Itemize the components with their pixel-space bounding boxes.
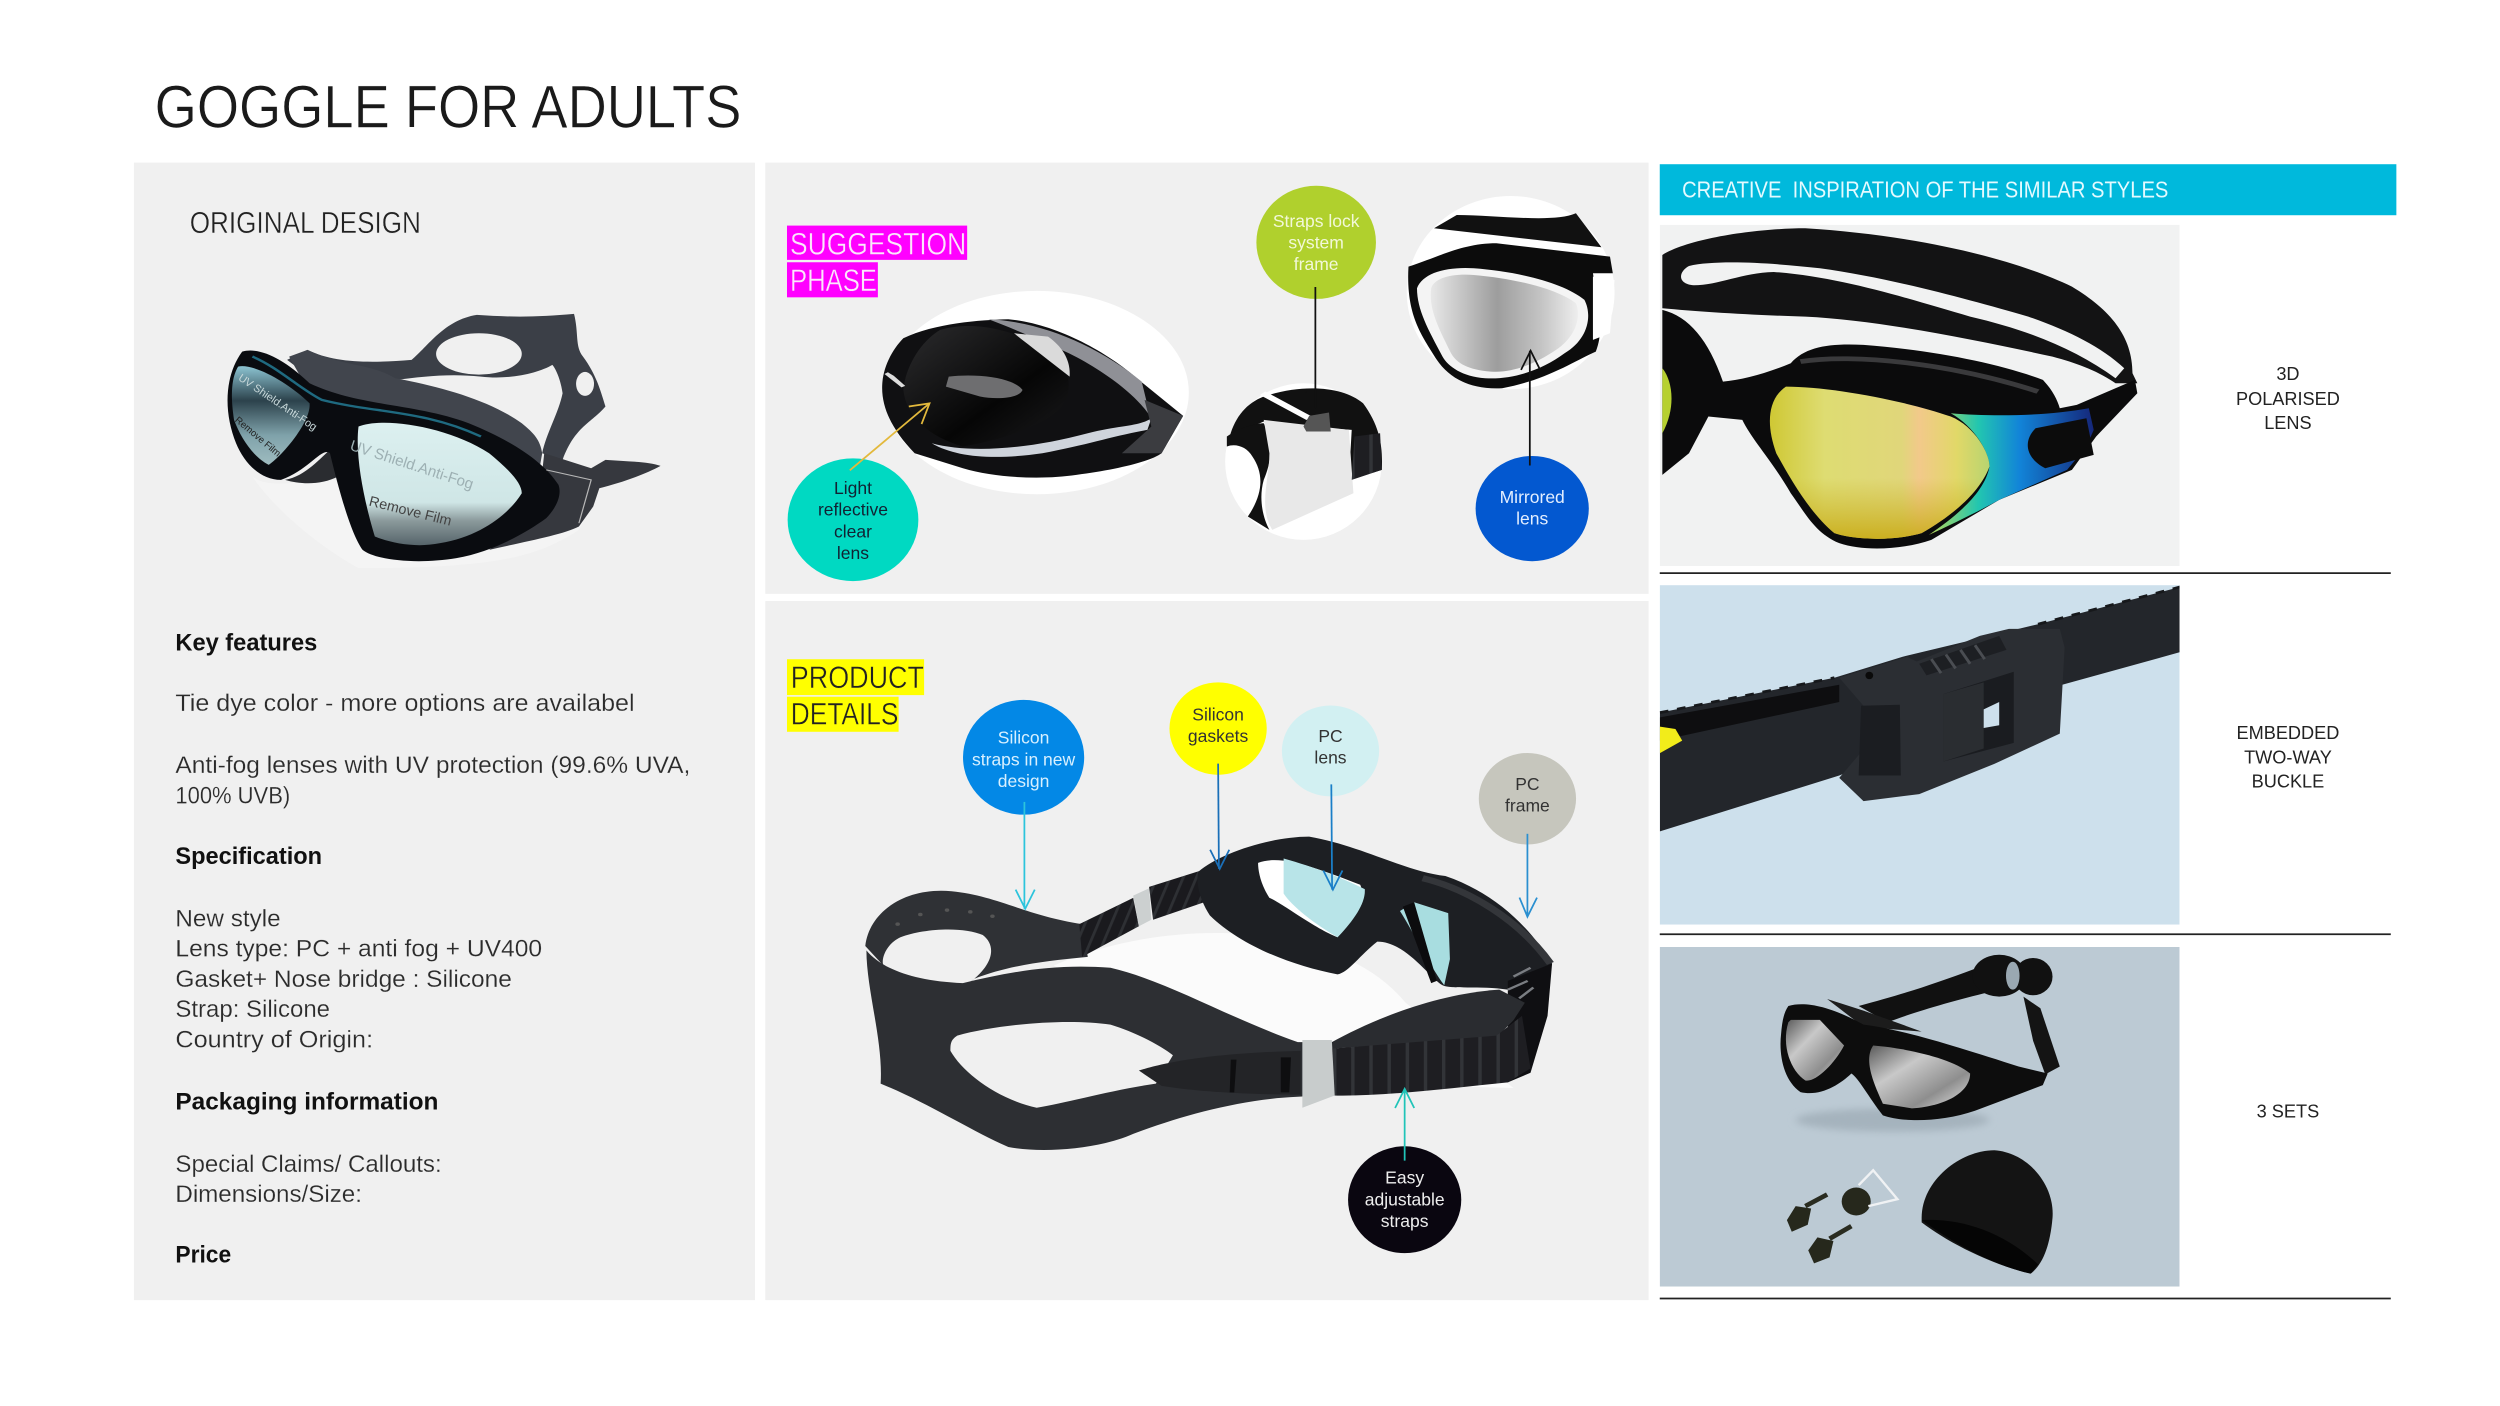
callout: easy adjustable straps: Easy [1385, 1168, 1424, 1188]
text block: specification: Lens type: PC + anti fog + UV400 [175, 936, 542, 963]
callout: silicon gaskets [1169, 682, 1267, 775]
label: 3D polarised lens: 3D [2276, 364, 2300, 384]
divider lines [1660, 573, 2391, 1299]
arrow: pc lens pointer [1323, 784, 1342, 890]
lens print text: Remove Film [232, 415, 283, 459]
panel: product details [765, 601, 1649, 1300]
arrow: adjustable straps pointer [1395, 1089, 1414, 1161]
heading: suggestion phase: PHASE [790, 262, 877, 298]
text block: key features: 100% UVB) [175, 783, 290, 810]
text block: key features: Tie dye color - more options are availabel [175, 690, 635, 717]
title: GOGGLE FOR ADULTS [155, 73, 741, 141]
callout: pc frame: frame [1505, 795, 1550, 815]
photo: black lens close-up [882, 291, 1189, 494]
callout: pc lens: lens [1314, 748, 1347, 768]
callout: light reflective clear lens [788, 458, 918, 581]
photo: mirrored lens close-up [1407, 196, 1615, 389]
text block: specification: New style [175, 905, 281, 932]
heading: product details [787, 659, 924, 732]
photo: strap lock close-up [1225, 383, 1382, 540]
photo: original goggle [228, 314, 661, 568]
callout: silicon gaskets: Silicon [1192, 705, 1244, 725]
label: 3D polarised lens [2236, 364, 2340, 433]
callout: easy adjustable straps: adjustable [1365, 1189, 1445, 1209]
callout: easy adjustable straps: straps [1381, 1211, 1429, 1231]
photo: embedded two-way buckle [1660, 585, 2180, 925]
callout: mirrored lens: Mirrored [1500, 487, 1565, 507]
callout: light reflective clear lens: clear [834, 521, 872, 541]
label: embedded two-way buckle: TWO-WAY [2244, 748, 2332, 768]
heading: product details: DETAILS [791, 696, 898, 732]
heading: suggestion phase: SUGGESTION [790, 225, 966, 261]
callout: silicon gaskets: gaskets [1188, 726, 1249, 746]
callout: silicon straps: straps in new [972, 749, 1076, 769]
text block: price: Price [175, 1242, 231, 1269]
callout: pc frame [1479, 753, 1576, 844]
text block: key features: Key features [175, 629, 317, 656]
arrow: silicon straps pointer [1016, 802, 1035, 909]
header bar: creative inspiration: CREATIVE INSPIRATION OF THE SIMILAR STYLES [1682, 177, 2168, 203]
callout: light reflective clear lens: Light [834, 478, 872, 498]
text block: specification [175, 843, 542, 1053]
callout: light reflective clear lens: reflective [818, 500, 888, 520]
label: 3 sets: 3 SETS [2257, 1102, 2319, 1122]
lens print text: UV Shield.Anti-Fog [348, 437, 476, 493]
callout: straps lock system frame: Straps lock [1273, 211, 1360, 231]
callout: mirrored lens: lens [1516, 509, 1549, 529]
callout: mirrored lens [1476, 456, 1589, 561]
label: 3D polarised lens: POLARISED [2236, 389, 2340, 409]
text block: specification: Gasket+ Nose bridge : Silicone [175, 966, 512, 993]
panel: original design [134, 163, 755, 1300]
arrow: pc frame pointer [1519, 834, 1537, 917]
label: embedded two-way buckle: EMBEDDED [2236, 723, 2339, 743]
text block: packaging information [175, 1089, 442, 1208]
callout: easy adjustable straps [1348, 1146, 1461, 1253]
callout: silicon straps: design [998, 771, 1049, 791]
callout: straps lock system frame: frame [1294, 254, 1339, 274]
lens print text [232, 372, 476, 530]
callout: pc lens [1282, 705, 1379, 796]
label: embedded two-way buckle: BUCKLE [2252, 772, 2324, 792]
text block: packaging information: Packaging information [175, 1089, 438, 1116]
label: embedded two-way buckle [2236, 723, 2339, 792]
callout: silicon straps [963, 700, 1084, 815]
text block: key features [175, 629, 690, 810]
panel: creative inspiration [1660, 164, 2396, 1299]
callout: light reflective clear lens: lens [837, 543, 869, 563]
heading: original design: ORIGINAL DESIGN [190, 207, 421, 240]
arrow: light reflective pointer [850, 403, 930, 470]
lens print text: UV Shield.Anti-Fog [236, 372, 319, 433]
photo: 3D polarised lens goggles [1660, 225, 2180, 566]
callout: pc frame: PC [1515, 774, 1540, 794]
arrow: mirrored lens pointer [1521, 351, 1540, 466]
text block: packaging information: Dimensions/Size: [175, 1181, 362, 1208]
callout: straps lock system frame: system [1288, 233, 1344, 253]
heading: suggestion phase [787, 225, 967, 298]
text block: specification: Specification [175, 843, 322, 870]
callout: silicon straps: Silicon [998, 728, 1049, 748]
text block: key features: Anti-fog lenses with UV protection (99.6% UVA, [175, 752, 690, 779]
callout: straps lock system frame [1256, 186, 1376, 299]
label: 3D polarised lens: LENS [2264, 413, 2312, 433]
heading: product details: PRODUCT [791, 659, 924, 695]
text block: specification: Country of Origin: [175, 1026, 373, 1053]
header bar: creative inspiration [1660, 164, 2396, 215]
arrow: strap lock pointer [1306, 287, 1325, 411]
photo: goggle back view [865, 837, 1552, 1150]
callout: pc lens: PC [1318, 726, 1343, 746]
arrow: silicon gaskets pointer [1210, 764, 1229, 869]
text block: specification: Strap: Silicone [175, 996, 330, 1023]
lens print text: Remove Film [367, 494, 453, 530]
photo: 3 sets accessories [1660, 947, 2180, 1287]
panel: suggestion phase [765, 163, 1649, 594]
text block: packaging information: Special Claims/ Callouts: [175, 1151, 442, 1178]
